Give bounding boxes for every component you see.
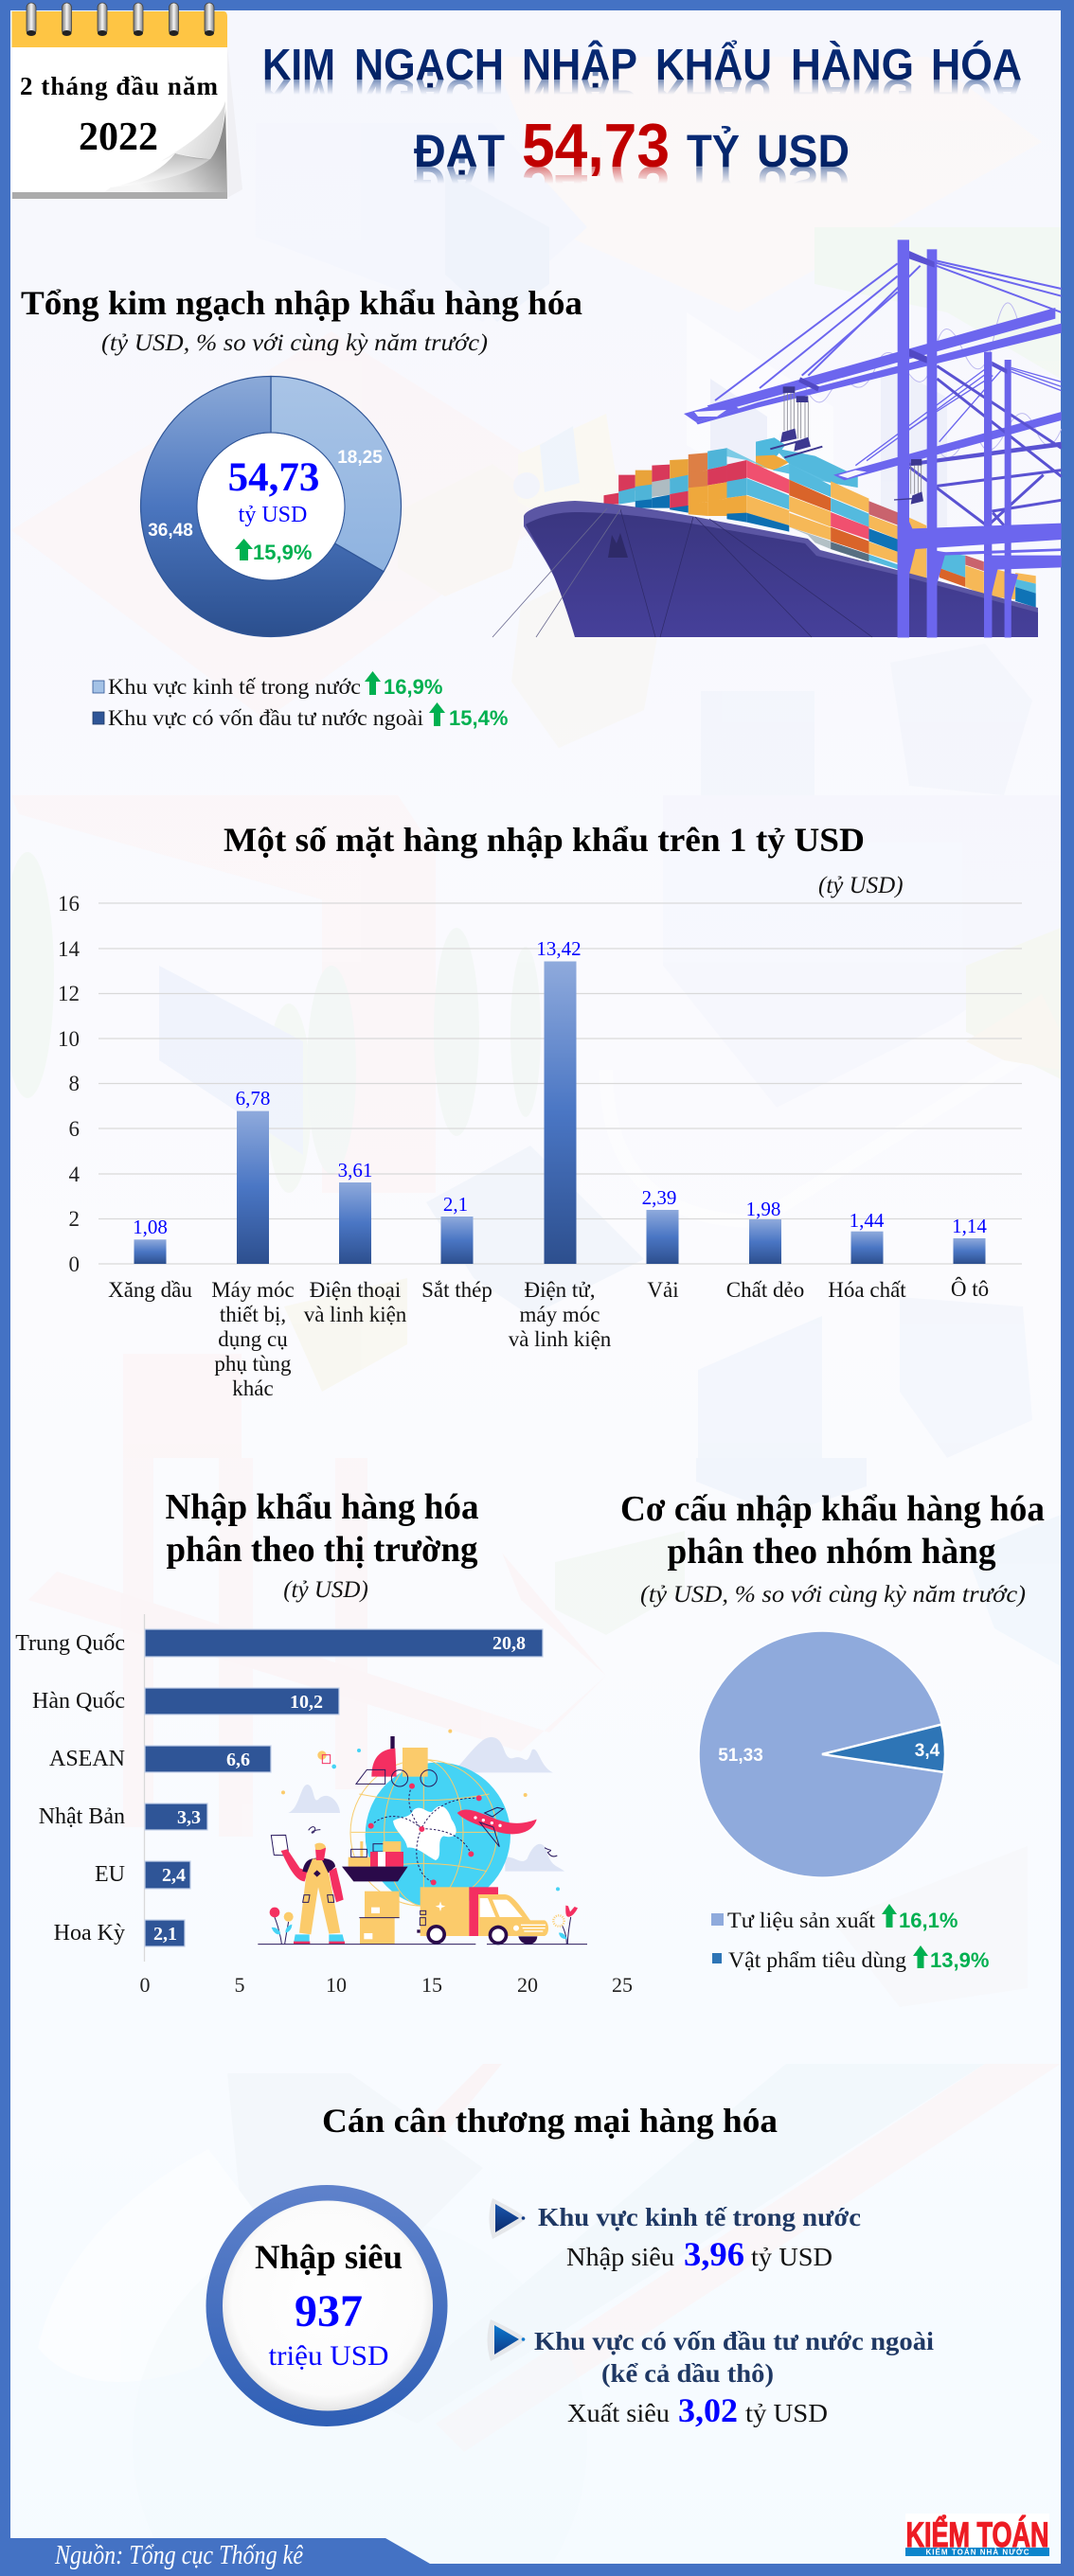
item: domestic sector: Khu vực kinh tế trong nước	[538, 2203, 861, 2231]
bar chart: 14	[58, 937, 80, 961]
section: total import value	[21, 284, 582, 730]
main title: HÀNG	[791, 70, 914, 119]
horizontal bar chart: 25	[612, 1973, 633, 1997]
bar chart: 1,08	[133, 1216, 168, 1238]
circle: trade deficit: triệu USD	[269, 2340, 388, 2372]
wavy crane cables	[805, 303, 1062, 457]
donut chart: 18,25	[337, 448, 383, 468]
main title: KHẨU	[655, 70, 772, 119]
item: foreign-invested sector: tỷ USD	[745, 2399, 828, 2427]
horizontal bar chart: 20,8	[492, 1633, 526, 1654]
item: domestic sector: Nhập siêu	[566, 2243, 675, 2271]
horizontal bar chart: 0	[140, 1973, 150, 1997]
bar chart: Xăng dầu	[108, 1278, 192, 1302]
footer source: Nguồn: Tổng cục Thống kê	[54, 2541, 303, 2570]
section: import structure by group	[620, 1489, 1045, 1972]
pie chart	[699, 1631, 945, 1877]
main title: KHẨU	[655, 40, 772, 89]
bar chart: 8	[68, 1072, 80, 1095]
item: domestic sector	[489, 2198, 861, 2273]
bar chart: và linh kiện	[304, 1303, 407, 1326]
calendar: period	[11, 3, 242, 199]
bar chart: Sắt thép	[421, 1278, 492, 1302]
section: trade balance	[206, 2102, 935, 2429]
main title: ĐẠT	[414, 127, 505, 177]
heading: Một số mặt hàng nhập khẩu trên 1 tỷ USD	[224, 821, 865, 859]
bar chart: 1,98	[746, 1198, 780, 1220]
section: imports by market: phân theo thị trường	[167, 1530, 477, 1570]
footer source	[10, 2538, 430, 2576]
legend: 16,1%	[899, 1909, 958, 1932]
illustration: global logistics	[258, 1730, 587, 1945]
legend: Khu vực có vốn đầu tư nước ngoài	[108, 706, 423, 730]
main title: NGẠCH	[354, 70, 504, 119]
bar chart: 0	[68, 1252, 80, 1276]
port cranes	[684, 240, 1062, 637]
unit note: (tỷ USD)	[283, 1577, 368, 1603]
heading: Tổng kim ngạch nhập khẩu hàng hóa	[21, 284, 582, 322]
bar chart: Vải	[647, 1278, 679, 1302]
bar chart: 6	[68, 1117, 80, 1141]
bar chart: Ô tô	[951, 1276, 989, 1301]
bar chart: 12	[58, 982, 80, 1005]
heading: Cán cân thương mại hàng hóa	[322, 2102, 778, 2140]
bar chart: 3,61	[338, 1159, 372, 1181]
bar chart: phụ tùng	[214, 1352, 292, 1376]
horizontal bar chart: 10,2	[290, 1692, 323, 1713]
crane spreaders and cables	[770, 386, 923, 505]
heading: Nhập khẩu hàng hóa	[165, 1487, 479, 1527]
main title: USD	[757, 156, 850, 206]
bar chart: 1,14	[952, 1215, 987, 1237]
horizontal bar chart: 2,4	[162, 1865, 186, 1886]
bar chart	[58, 892, 1022, 1400]
horizontal bar chart: 15	[421, 1973, 442, 1997]
main title: KIM	[262, 40, 335, 89]
bar chart: 4	[68, 1163, 80, 1186]
main title: NGẠCH	[354, 40, 504, 89]
horizontal bar chart: EU	[95, 1862, 125, 1887]
horizontal bar chart: ASEAN	[49, 1747, 125, 1771]
main title: TỶ	[687, 156, 740, 208]
main title: NHẬP	[522, 40, 637, 89]
horizontal bar chart: 2,1	[153, 1924, 177, 1945]
main title: NHẬP	[522, 70, 637, 119]
illustration: container ship and port cranes	[492, 240, 1062, 637]
main title	[262, 40, 1022, 222]
legend: Khu vực kinh tế trong nước	[108, 675, 361, 699]
bar chart: Điện thoại	[310, 1278, 401, 1302]
bar chart: Hóa chất	[828, 1278, 906, 1302]
bar chart: 16	[58, 892, 80, 915]
circle: trade deficit: 937	[295, 2286, 363, 2336]
main title: 54,73	[522, 153, 670, 222]
main title: HÓA	[931, 40, 1022, 89]
bar chart: thiết bị,	[220, 1303, 286, 1326]
logo: Kiểm Toán: KIỂM TOÁN NHÀ NƯỚC	[926, 2549, 1029, 2557]
bar chart: Điện tử,	[524, 1278, 596, 1302]
circle: trade deficit: Nhập siêu	[255, 2238, 403, 2276]
item: foreign-invested sector	[487, 2319, 935, 2429]
section: items over 1 billion USD	[58, 821, 1022, 1400]
main title: ĐẠT	[414, 156, 505, 206]
legend	[93, 671, 508, 730]
bar chart: dụng cụ	[218, 1327, 288, 1351]
icon: arrow bullet	[487, 2319, 526, 2361]
section: import structure by group: phân theo nhóm hàng	[667, 1532, 996, 1572]
donut chart	[141, 377, 402, 637]
donut chart: 54,73	[228, 455, 319, 500]
horizontal bar chart: 6,6	[226, 1750, 250, 1770]
heading: Cơ cấu nhập khẩu hàng hóa	[620, 1489, 1045, 1529]
bar chart: 10	[58, 1027, 80, 1051]
horizontal bar chart: Nhật Bản	[39, 1804, 125, 1829]
containers on deck	[603, 437, 1036, 608]
circle: trade deficit	[206, 2185, 447, 2426]
bar chart: Máy móc	[211, 1278, 295, 1302]
horizontal bar chart: 10	[326, 1973, 347, 1997]
bar chart: 2,39	[642, 1186, 676, 1209]
main title: 54,73	[522, 111, 670, 180]
bar chart: Chất dẻo	[726, 1278, 804, 1302]
unit note: (tỷ USD)	[818, 873, 904, 898]
calendar: period: 2 tháng đầu năm	[20, 72, 218, 100]
unit note: (tỷ USD, % so với cùng kỳ năm trước)	[640, 1582, 1026, 1608]
main title: HÀNG	[791, 40, 914, 89]
horizontal bar chart: Hoa Kỳ	[54, 1921, 125, 1945]
pie chart: 51,33	[718, 1746, 763, 1766]
item: domestic sector: tỷ USD	[751, 2243, 832, 2271]
icon: arrow bullet	[489, 2198, 526, 2239]
item: foreign-invested sector: 3,02	[678, 2391, 738, 2429]
main title: USD	[757, 127, 850, 177]
item: domestic sector: 3,96	[684, 2235, 744, 2273]
horizontal bar chart: 20	[517, 1973, 538, 1997]
donut chart: 15,9%	[253, 541, 312, 564]
item: foreign-invested sector: (kể cả dầu thô)	[601, 2359, 774, 2388]
bar chart: 2,1	[443, 1193, 468, 1216]
bar chart: 2	[68, 1207, 80, 1231]
unit note: (tỷ USD, % so với cùng kỳ năm trước)	[101, 330, 488, 356]
main title: TỶ	[687, 125, 740, 177]
horizontal bar chart: 5	[235, 1973, 244, 1997]
bar chart: 6,78	[236, 1087, 270, 1110]
horizontal bar chart: Hàn Quốc	[32, 1689, 125, 1714]
item: foreign-invested sector: Khu vực có vốn đầu tư nước ngoài	[534, 2327, 935, 2355]
bar chart: 13,42	[536, 937, 582, 960]
bar chart: 1,44	[850, 1209, 885, 1232]
donut chart: tỷ USD	[239, 503, 307, 527]
bar chart: máy móc	[520, 1303, 600, 1326]
legend: Tư liệu sản xuất	[727, 1909, 876, 1932]
legend	[711, 1904, 989, 1972]
horizontal bar chart: Trung Quốc	[15, 1631, 125, 1656]
item: foreign-invested sector: Xuất siêu	[567, 2399, 671, 2427]
bar chart: khác	[232, 1377, 274, 1400]
main title: KIM	[262, 70, 335, 119]
legend: Vật phẩm tiêu dùng	[728, 1948, 907, 1972]
section: imports by market	[15, 1487, 633, 1997]
pie chart: 3,4	[915, 1741, 940, 1761]
bar chart: và linh kiện	[509, 1327, 612, 1351]
ship hull	[492, 501, 1038, 637]
horizontal bar chart	[15, 1614, 633, 1997]
calendar: period: 2022	[79, 115, 158, 159]
legend: 13,9%	[930, 1948, 989, 1972]
donut chart: 36,48	[148, 521, 193, 541]
legend: 16,9%	[384, 675, 442, 699]
legend: 15,4%	[449, 706, 508, 730]
main title: HÓA	[931, 70, 1022, 119]
horizontal bar chart: 3,3	[177, 1807, 201, 1828]
